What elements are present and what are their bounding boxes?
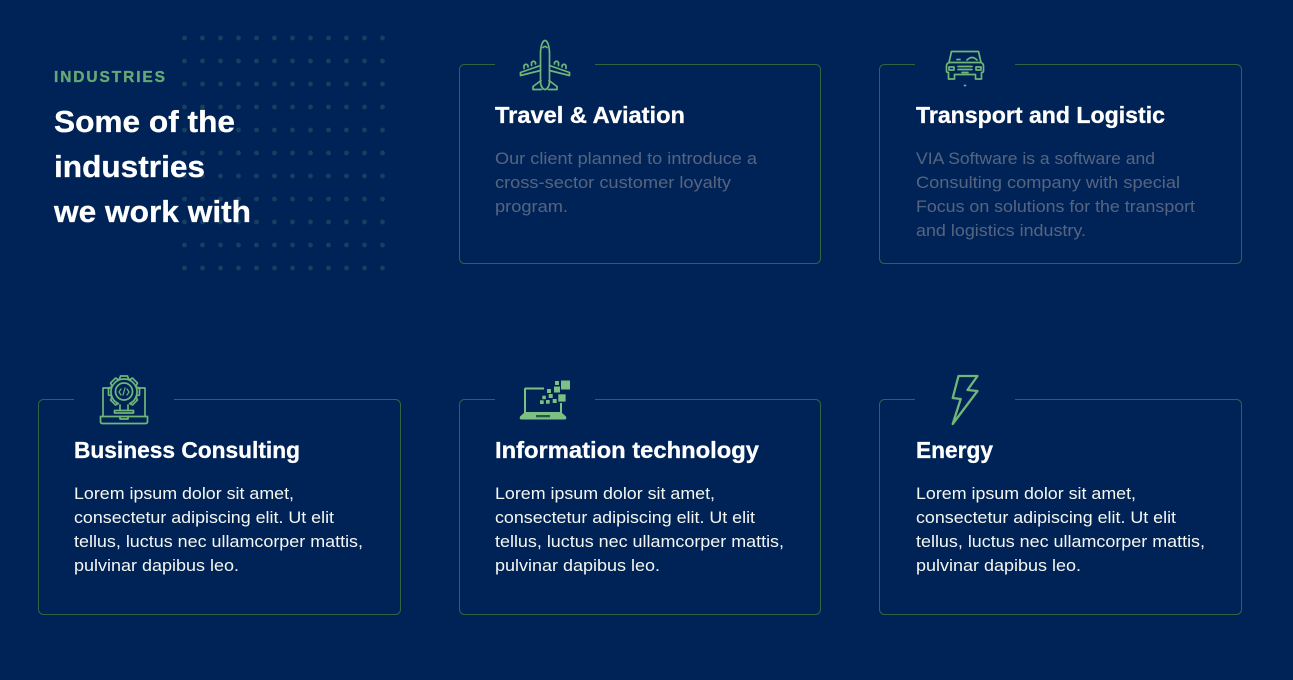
description [495, 150, 758, 216]
description: Focus on solutions for the transport [916, 198, 1195, 216]
description: Our client planned to introduce a [495, 150, 758, 168]
description: tellus, luctus nec ullamcorper mattis, [495, 533, 784, 551]
icon: laptop with gear [100, 376, 148, 424]
description: pulvinar dapibus leo. [916, 557, 1081, 575]
description: VIA Software is a software and [916, 150, 1155, 168]
description: Lorem ipsum dolor sit amet, [495, 485, 715, 503]
heading: Travel & Aviation [495, 102, 685, 128]
description: Consulting company with special [916, 174, 1180, 192]
eyebrow: industries: INDUSTRIES [54, 69, 165, 86]
description: Lorem ipsum dolor sit amet, [916, 485, 1136, 503]
description [916, 485, 1205, 575]
description: consectetur adipiscing elit. Ut elit [916, 509, 1176, 527]
icon: car [946, 52, 984, 86]
description: pulvinar dapibus leo. [74, 557, 239, 575]
panel: energy [880, 376, 1242, 614]
description: consectetur adipiscing elit. Ut elit [74, 509, 334, 527]
panel: information technology [460, 380, 820, 614]
dot pattern [176, 26, 392, 280]
icon: laptop with pixels [520, 380, 570, 420]
heading: Energy [916, 437, 993, 463]
section title: industries [54, 149, 205, 184]
description: tellus, luctus nec ullamcorper mattis, [916, 533, 1205, 551]
description: consectetur adipiscing elit. Ut elit [495, 509, 755, 527]
panel: transport and logistic [880, 52, 1242, 264]
heading: Transport and Logistic [916, 102, 1165, 128]
panel: travel and aviation [460, 40, 820, 264]
heading: Information technology [495, 437, 759, 463]
description [495, 485, 784, 575]
description: tellus, luctus nec ullamcorper mattis, [74, 533, 363, 551]
description [916, 150, 1195, 240]
icon: lightning bolt [953, 376, 978, 424]
description: pulvinar dapibus leo. [495, 557, 660, 575]
description: Lorem ipsum dolor sit amet, [74, 485, 294, 503]
description [74, 485, 363, 575]
description: and logistics industry. [916, 222, 1086, 240]
description: cross-sector customer loyalty [495, 174, 732, 192]
section title: Some of the [54, 104, 235, 139]
icon: airplane [520, 40, 570, 90]
section title [53, 104, 251, 229]
heading: Business Consulting [74, 437, 300, 463]
section title: we work with [53, 194, 251, 229]
description: program. [495, 198, 568, 216]
panel: business consulting [38, 376, 400, 614]
